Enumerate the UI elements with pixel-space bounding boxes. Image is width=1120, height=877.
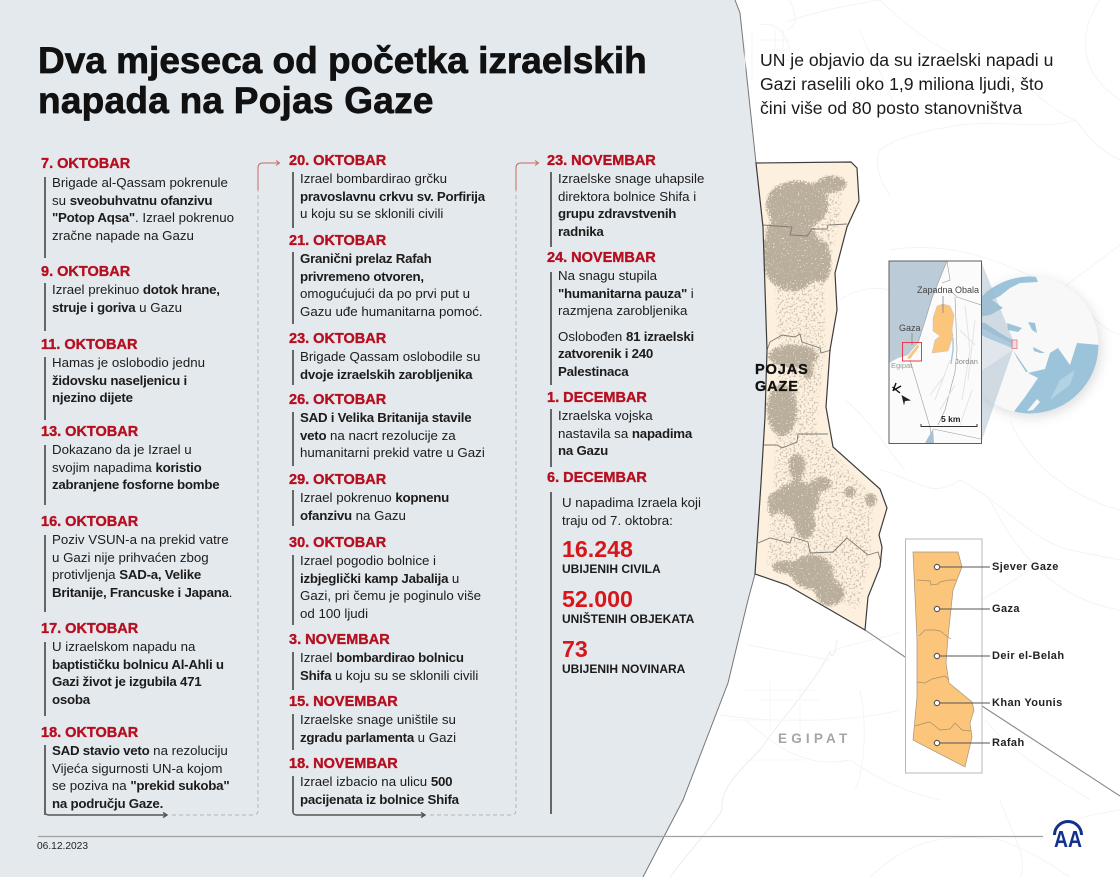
entry: 17. oktobar — [41, 621, 224, 716]
column 2 bottom arrow — [293, 800, 425, 818]
entry: 21. oktobar — [289, 233, 483, 324]
entry: 21. oktobar: Granični prelaz Rafah — [300, 251, 431, 266]
entry: 13. oktobar: Dokazano da je Izrael u — [52, 442, 192, 457]
entry: 26. oktobar: 26. OKTOBAR — [289, 392, 386, 408]
entry: 26. oktobar — [289, 392, 485, 466]
entry: 18. oktobar: na području Gaze. — [52, 796, 163, 811]
entry: 18. oktobar: 18. OKTOBAR — [41, 725, 138, 741]
entry: 3. novembar: 3. NOVEMBAR — [289, 632, 390, 648]
entry: 23. novembar: grupu zdravstvenih — [558, 206, 676, 221]
column 1 entries — [41, 156, 234, 815]
map label: Egipat: EGIPAT — [778, 731, 851, 746]
scale label: 5 km — [941, 414, 960, 424]
stat: 16.248 civilians: 16.248 — [562, 536, 633, 562]
entry: 17. oktobar: Gazi život je izgubila 471 — [52, 674, 201, 689]
entry: 13. oktobar: 13. OKTOBAR — [41, 424, 138, 440]
entry: 30. oktobar: od 100 ljudi — [300, 606, 368, 621]
entry: 15. novembar: Izraelske snage uništile su — [300, 712, 456, 727]
entry: 24. novembar: Oslobođen 81 izraelski — [558, 328, 694, 344]
entry: 6. decembar with casualty statistics — [547, 470, 701, 814]
district label: Sjever Gaze: Sjever Gaze — [992, 561, 1059, 573]
north arrow — [892, 383, 911, 406]
entry: 18. oktobar: Vijeća sigurnosti UN-a kojom — [52, 761, 222, 776]
entry: 20. oktobar — [289, 153, 486, 228]
entry: 30. oktobar: 30. OKTOBAR — [289, 535, 386, 551]
inset label: Gaza: Gaza — [899, 323, 921, 333]
entry: 6. decembar with casualty statistics: U napadima Izraela koji — [562, 495, 701, 510]
district label: Khan Younis: Khan Younis — [992, 697, 1063, 709]
roads — [670, 0, 1120, 877]
entry: 18. novembar — [289, 756, 460, 812]
entry: 11. oktobar — [41, 337, 205, 420]
entry: 23. novembar: radnika — [558, 224, 604, 239]
entry: 16. oktobar: 16. OKTOBAR — [41, 514, 138, 530]
entry: 1. decembar: nastavila sa napadima — [558, 426, 692, 441]
map label: Pojas Gaze: GAZE — [755, 379, 799, 395]
scale bar — [921, 424, 977, 426]
district label: Rafah: Rafah — [992, 737, 1025, 749]
entry: 30. oktobar: Gazi, pri čemu je poginulo više — [300, 588, 481, 603]
timeline connector: column 1 to 2 — [172, 160, 280, 815]
entry: 16. oktobar: Poziv VSUN-a na prekid vatre — [52, 532, 229, 547]
title — [38, 40, 647, 121]
district label: Deir el-Belah: Deir el-Belah — [992, 650, 1064, 662]
entry: 3. novembar: Izrael bombardirao bolnicu — [300, 650, 464, 665]
entry: 24. novembar: "humanitarna pauza" i — [558, 286, 694, 301]
entry: 29. oktobar: 29. OKTOBAR — [289, 472, 386, 488]
entry: 29. oktobar: Izrael pokrenuo kopnenu — [300, 490, 449, 505]
entry: 20. oktobar: pravoslavnu crkvu sv. Porfirija — [300, 189, 485, 204]
intro text: UN je objavio da su izraelski napadi u — [760, 50, 1053, 70]
entry: 15. novembar: 15. NOVEMBAR — [289, 694, 398, 710]
entry: 3. novembar: Shifa u koju su se sklonili civili — [300, 668, 478, 683]
entry: 30. oktobar: izbjeglički kamp Jabalija u — [300, 571, 459, 586]
entry: 7. oktobar: su sveobuhvatnu ofanzivu — [52, 193, 212, 208]
inset label: Egipat: Egipat — [891, 361, 912, 370]
entry: 15. novembar: zgradu parlamenta u Gazi — [300, 730, 456, 745]
entry: 24. novembar: 24. NOVEMBAR — [547, 250, 656, 266]
entry: 24. novembar: Palestinaca — [558, 364, 628, 379]
entry: 21. oktobar: Gazu uđe humanitarna pomoć. — [300, 304, 483, 319]
locator inset — [889, 261, 982, 444]
entry: 16. oktobar — [41, 514, 232, 612]
administrative districts inset — [906, 539, 990, 773]
footer line — [38, 836, 1043, 838]
entry: 1. decembar: 1. DECEMBAR — [547, 390, 647, 406]
entry: 1. decembar: na Gazu — [558, 443, 608, 458]
entry: 9. oktobar: 9. OKTOBAR — [41, 264, 130, 280]
intro text — [760, 50, 1053, 118]
entry: 21. oktobar: privremeno otvoren, — [300, 269, 424, 284]
column 2 entries — [289, 153, 486, 812]
entry: 11. oktobar: njezino dijete — [52, 390, 133, 405]
entry: 21. oktobar: 21. OKTOBAR — [289, 233, 386, 249]
intro text: Gazi raselili oko 1,9 miliona ljudi, što — [760, 74, 1044, 94]
entry: 18. oktobar: SAD stavio veto na rezoluciju — [52, 743, 228, 758]
entry: 7. oktobar: Brigade al-Qassam pokrenule — [52, 175, 228, 190]
date: 06.12.2023 — [37, 841, 88, 852]
entry: 20. oktobar: Izrael bombardirao grčku — [300, 171, 447, 186]
entry: 13. oktobar: svojim napadima koristio — [52, 460, 202, 475]
timeline connector: column 2 to 3 — [430, 160, 538, 815]
entry: 29. oktobar — [289, 472, 449, 526]
entry: 23. oktobar: 23. OKTOBAR — [289, 331, 386, 347]
column 3 entries — [547, 153, 704, 814]
coastline — [643, 0, 756, 877]
entry: 18. novembar: Izrael izbacio na ulicu 500 — [300, 774, 452, 789]
map label: Pojas Gaze: POJAS — [755, 362, 809, 378]
entry: 23. oktobar: dvoje izraelskih zarobljenika — [300, 367, 472, 382]
entry: 24. novembar: Na snagu stupila — [558, 268, 657, 283]
entry: 26. oktobar: veto na nacrt rezolucije za — [300, 428, 456, 443]
entry: 1. decembar: Izraelska vojska — [558, 408, 653, 423]
entry: 16. oktobar: protivljenja SAD-a, Velike — [52, 567, 201, 582]
entry: 23. oktobar — [289, 331, 480, 385]
entry: 9. oktobar: Izrael prekinuo dotok hrane, — [52, 282, 220, 297]
locator rectangle on globe — [1012, 340, 1017, 348]
inset label: Zapadna Obala: Zapadna Obala — [917, 285, 979, 295]
title: napada na Pojas Gaze — [38, 80, 434, 121]
entry: 30. oktobar: Izrael pogodio bolnice i — [300, 553, 436, 568]
entry: 7. oktobar — [41, 156, 234, 258]
entry: 30. oktobar — [289, 535, 481, 625]
district label: Gaza: Gaza — [992, 603, 1020, 615]
entry: 24. novembar — [547, 250, 694, 385]
entry: 26. oktobar: humanitarni prekid vatre u Gazi — [300, 445, 485, 460]
entry: 16. oktobar: u Gazi nije prihvaćen zbog — [52, 550, 209, 565]
entry: 23. novembar: direktora bolnice Shifa i — [558, 189, 696, 204]
entry: 26. oktobar: SAD i Velika Britanija stavile — [300, 410, 471, 425]
entry: 21. oktobar: omogućujući da po prvi put u — [300, 286, 470, 301]
entry: 18. oktobar — [41, 725, 229, 815]
title: Dva mjeseca od početka izraelskih — [38, 40, 647, 81]
entry: 9. oktobar — [41, 264, 220, 331]
entry: 24. novembar: zatvorenik i 240 — [558, 346, 653, 361]
stat label: UBIJENIH NOVINARA — [562, 662, 685, 676]
entry: 20. oktobar: 20. OKTOBAR — [289, 153, 386, 169]
inset label: Jordan: Jordan — [955, 357, 978, 366]
entry: 17. oktobar: 17. OKTOBAR — [41, 621, 138, 637]
entry: 18. oktobar: se poziva na "prekid sukoba" — [52, 778, 229, 793]
entry: 7. oktobar: zračne napade na Gazu — [52, 228, 194, 243]
entry: 9. oktobar: struje i goriva u Gazu — [52, 300, 182, 315]
entry: 23. oktobar: Brigade Qassam oslobodile su — [300, 349, 480, 364]
entry: 29. oktobar: ofanzivu na Gazu — [300, 508, 406, 523]
entry: 6. decembar with casualty statistics: traju od 7. oktobra: — [562, 513, 673, 528]
entry: 7. oktobar: 7. OKTOBAR — [41, 156, 130, 172]
stat label: UNIŠTENIH OBJEKATA — [562, 612, 694, 626]
entry: 23. novembar — [547, 153, 704, 247]
entry: 24. novembar: razmjena zarobljenika — [558, 303, 687, 318]
entry: 11. oktobar: židovsku naseljenicu i — [52, 373, 187, 388]
entry: 3. novembar — [289, 632, 478, 690]
Gaza strip — [755, 162, 887, 630]
Egypt-Israel border — [865, 630, 1120, 796]
entry: 11. oktobar: Hamas je oslobodio jednu — [52, 355, 205, 370]
stat: 73 journalists: 73 — [562, 636, 588, 662]
entry: 7. oktobar: "Potop Aqsa". Izrael pokrenuo — [52, 210, 234, 225]
entry: 23. novembar: 23. NOVEMBAR — [547, 153, 656, 169]
entry: 17. oktobar: U izraelskom napadu na — [52, 639, 195, 654]
entry: 23. novembar: Izraelske snage uhapsile — [558, 171, 704, 186]
globe — [982, 276, 1104, 420]
sea panel — [0, 0, 767, 877]
wedge from locator inset to globe — [981, 261, 1013, 443]
stat label: UBIJENIH CIVILA — [562, 562, 661, 576]
entry: 11. oktobar: 11. OKTOBAR — [41, 337, 137, 353]
stat: 52.000 buildings: 52.000 — [562, 586, 633, 612]
entry: 17. oktobar: osoba — [52, 692, 90, 707]
entry: 13. oktobar: zabranjene fosforne bombe — [52, 477, 219, 492]
entry: 1. decembar — [547, 390, 692, 467]
entry: 15. novembar — [289, 694, 456, 750]
intro text: čini više od 80 posto stanovništva — [760, 98, 1022, 118]
entry: 13. oktobar — [41, 424, 220, 505]
entry: 18. novembar: 18. NOVEMBAR — [289, 756, 398, 772]
entry: 20. oktobar: u koju su se sklonili civili — [300, 206, 443, 221]
entry: 6. decembar with casualty statistics: 6. DECEMBAR — [547, 470, 647, 486]
entry: 18. novembar: pacijenata iz bolnice Shifa — [300, 792, 459, 807]
map label: Pojas Gaze — [755, 362, 809, 395]
entry: 17. oktobar: baptističku bolnicu Al-Ahli u — [52, 657, 224, 672]
column 1 bottom arrow — [45, 800, 167, 818]
entry: 16. oktobar: Britanije, Francuske i Japana. — [52, 585, 232, 600]
